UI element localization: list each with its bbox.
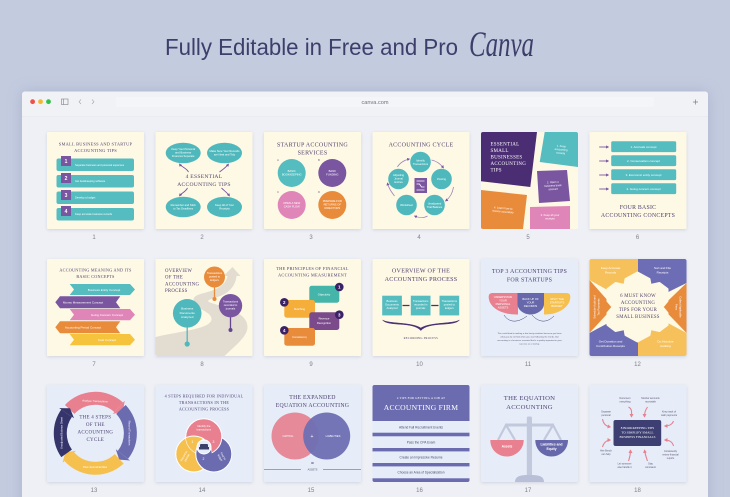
road with arrow (156, 267, 248, 356)
tip labels: Make Sure Your Records (210, 149, 240, 153)
pin: transactions posted (204, 266, 225, 301)
heading: THE PRINCIPLES OF FINANCIAL (276, 266, 349, 271)
arrow bands: Accounting Period Concept (65, 326, 101, 330)
ring segments (59, 398, 130, 468)
list rows: Get bookkeeping software (75, 179, 106, 183)
pin: transactions posted: Transactions (207, 271, 223, 275)
list rows: Keep accurate business records (75, 212, 113, 216)
arrow labels: everything (619, 400, 631, 404)
principle boxes: Matching (294, 307, 305, 311)
heading: OVERVIEW OF THE (392, 269, 450, 275)
semicircles: ASSETS (498, 306, 509, 310)
card 5: essential small businesses tips (481, 132, 578, 229)
segment labels: Fees (674, 304, 678, 311)
cycle circles (388, 152, 452, 215)
list rows: 4 (65, 209, 68, 215)
heading: THE 4 STEPS (79, 416, 111, 420)
number 18: 18 (634, 488, 641, 494)
pin: transactions posted: posted to (209, 274, 221, 278)
venn labels: Post to (219, 451, 227, 461)
process boxes: Analyzed (386, 306, 398, 310)
service circles: A (277, 159, 279, 162)
list rows (56, 156, 134, 220)
heading: PROCESS (165, 289, 188, 294)
venn labels (179, 424, 227, 464)
concept rows: 1. Accruals concept (630, 145, 657, 149)
tip labels: 4. Learn how to (494, 205, 513, 211)
semicircles (489, 293, 570, 315)
semicircles: BACK UP OF (522, 297, 539, 301)
concept rows (611, 141, 676, 194)
tip labels: to Tax Deadlines (173, 206, 194, 210)
heading: TRANSACTIONS IN THE (179, 400, 229, 405)
pan: liabilities and equity: Equity (546, 447, 557, 451)
circle labels: Unadjusted (428, 202, 442, 206)
paragraph: This could lead to making a few hasty mistakes because you have (497, 332, 562, 335)
tip labels: 2. Open a (547, 180, 559, 184)
number 2: 2 (200, 235, 204, 241)
flower centre (608, 272, 668, 342)
venn labels: 2 (203, 457, 205, 461)
number 3: 3 (309, 235, 313, 241)
tip labels: account (548, 187, 558, 191)
card 9: principles of measurement (264, 259, 361, 356)
pin: business documents (173, 299, 202, 347)
pin: business documents: Analyzed (181, 315, 194, 319)
tip labels: and Business (175, 150, 192, 154)
tip labels: are Neat and Tidy (214, 152, 236, 156)
service circles: D (318, 191, 320, 194)
number 8: 8 (200, 362, 204, 368)
heading: ACCOUNTING (490, 162, 526, 167)
number 16: 16 (416, 488, 423, 494)
arrow labels: else handle it (617, 466, 632, 469)
paragraph: accounting is a business essential that's a quality important in your (497, 339, 562, 342)
heading: ACCOUNTING (78, 430, 113, 436)
list rows: 3 (65, 193, 68, 199)
service circles: BANK (329, 169, 336, 173)
semicircles: STARTUP'S (550, 300, 565, 304)
venn labels: Identify the (197, 424, 211, 428)
arrow bands: Money Measurement Concept (63, 300, 103, 304)
arrow labels: receivable (645, 400, 657, 404)
number 7: 7 (92, 362, 96, 368)
card 8: overview road (156, 259, 252, 356)
ring labels: Record Transactions (128, 421, 132, 446)
number badges: 2 (283, 300, 286, 305)
circle labels: Adjusting (393, 173, 405, 177)
semicircles: RECORDS (524, 304, 537, 308)
segment labels: Records (605, 270, 617, 274)
arrow labels: Separate (601, 410, 612, 414)
tip labels: Remember and Stick (171, 203, 196, 207)
icon: money (199, 444, 209, 450)
heading: EQUATION ACCOUNTING (276, 403, 349, 409)
connector arcs (504, 315, 554, 321)
card 2: essential tips (156, 132, 252, 229)
heading: STARTUP ACCOUNTING (277, 142, 348, 148)
tip labels: Keep Your Personal (171, 147, 195, 151)
circle labels: Entries (394, 180, 403, 184)
heading: 6 MUST KNOW (620, 294, 656, 299)
arrow labels: cash payments (661, 414, 678, 417)
card 4: accounting cycle (372, 132, 470, 229)
venn diagram (176, 419, 232, 472)
arrows (599, 147, 608, 189)
number 10: 10 (416, 362, 423, 368)
browser toolbar (22, 92, 708, 117)
list rows: Develop a budget (75, 196, 96, 200)
number badges: 3 (338, 312, 341, 317)
arrow labels: Stay (648, 462, 654, 466)
arrow bands (55, 284, 135, 345)
segment labels: Receipts (657, 270, 669, 274)
heading: THE EQUATION (504, 395, 555, 402)
heading: ACCOUNTING CYCLE (389, 142, 453, 148)
number 13: 13 (91, 488, 98, 494)
list rows: Separate business and personal expenses (75, 163, 125, 167)
concept rows: 3. Economic entity concept (626, 173, 662, 177)
tip labels: business bank (544, 183, 562, 188)
pin: business documents: Documents (180, 311, 195, 315)
number 15: 15 (308, 488, 315, 494)
scale (498, 416, 561, 482)
card 11: top 3 tips (481, 259, 578, 356)
arrow labels: personal (601, 414, 611, 417)
heading: ACCOUNTING (506, 404, 553, 411)
service circles: CASH FLOW (284, 204, 300, 208)
circle labels: Journal (394, 176, 403, 180)
central box: 8 BOOKKEEPING TIPS (621, 426, 654, 430)
tip labels (171, 147, 240, 210)
pin: transactions recorded: recorded in (224, 303, 238, 307)
number 9: 9 (309, 362, 313, 368)
list text: Choose an Area of Specialization (398, 470, 445, 474)
tip labels: accounting (554, 147, 568, 152)
segment labels: Collect Applicable (678, 296, 682, 318)
heading: SMALL BUSINESS AND STARTUP (59, 142, 133, 146)
heading: ESSENTIAL (490, 142, 519, 148)
heading: TIPS FOR YOUR (619, 308, 658, 313)
heading: OF THE (165, 276, 183, 281)
pan: liabilities and equity: Liabilities and (541, 442, 562, 446)
heading: ACCOUNTING MEANING AND ITS (59, 268, 132, 272)
heading: SERVICES (298, 150, 327, 156)
principle boxes: Consistency (292, 335, 307, 339)
arrow labels: Hire Bench (600, 450, 613, 452)
concept rows: 2. Conservatism concept (627, 159, 660, 163)
segment labels: Keep Accurate (601, 266, 621, 270)
principle boxes: Recognition (317, 321, 332, 325)
arrows (180, 164, 230, 196)
brace (382, 320, 460, 330)
service circles (277, 159, 346, 219)
arrow labels: Consistently (664, 450, 678, 453)
pin: transactions recorded: journals (225, 306, 236, 310)
circle labels: Worksheet (400, 203, 413, 207)
semicircles: PERSONAL (496, 302, 511, 306)
list text: Pass the CPA Exam (407, 440, 436, 444)
process boxes: Documents (385, 302, 399, 306)
heading: ACCOUNTING CONCEPTS (601, 213, 675, 219)
arrow labels: Document (620, 397, 631, 400)
service circles: RETURNS OF (324, 202, 341, 206)
heading: SMALL (490, 149, 509, 154)
card 18: bookkeeping tips (590, 385, 686, 482)
arrow labels: review financial (662, 454, 679, 456)
canva wordmark: Canva (469, 24, 534, 64)
venn labels: 3 (213, 440, 215, 444)
title: Fully Editable in Free and Pro (165, 34, 458, 60)
heading: 4 STEPS REQUIRED FOR INDIVIDUAL (165, 394, 244, 398)
tip labels: records (556, 151, 566, 155)
browser toolbar: canva.com (361, 100, 389, 106)
process boxes: posted to (444, 302, 455, 306)
coloured segments (590, 259, 686, 356)
venn circles: CAPITAL (282, 434, 294, 438)
card 13: 4 steps cycle (47, 385, 144, 482)
heading: TIPS (490, 168, 502, 174)
card 12: 6 must know tips (590, 259, 686, 356)
list text: Create an Impressive Resume (399, 456, 443, 460)
pan: liabilities and equity (535, 440, 568, 456)
arrow bands: Going Concern Concept (91, 313, 123, 317)
semicircles: SPLIT THE (550, 297, 564, 301)
segment labels: Schedule Audit and (592, 295, 596, 319)
heading: 4 TIPS FOR GETTING A JOB AT (397, 396, 445, 400)
segment labels: Tax Payments (596, 298, 600, 315)
arrow labels: Monitor accounts (641, 397, 660, 400)
central box (614, 420, 661, 446)
process boxes: journals (415, 306, 426, 310)
arrow labels: reports (667, 457, 675, 460)
heading: ACCOUNTING MEASUREMENT (278, 272, 347, 278)
number badges (280, 283, 344, 335)
service circles: BOOKKEEPING (282, 172, 302, 176)
cycle arrows (388, 159, 454, 218)
service circles: B (318, 159, 320, 162)
circle labels: Transactions (413, 162, 429, 166)
equals and assets: ASSETS (308, 468, 318, 472)
service circles: PREPARE FOR (323, 199, 342, 203)
list rows: 2 (65, 176, 68, 182)
heading: BASIC CONCEPTS (76, 274, 115, 279)
heading: BUSINESSES (490, 156, 522, 160)
number badges: 1 (338, 285, 341, 290)
venn circles: + (311, 434, 314, 440)
venn labels: journal (183, 453, 191, 463)
heading: CYCLE (86, 438, 104, 443)
arrow labels: Let someone (618, 462, 632, 466)
semicircles: BUDGET (551, 304, 563, 308)
number 12: 12 (634, 362, 641, 368)
venn labels: Record in (179, 450, 189, 462)
heading: SMALL BUSINESS (616, 315, 660, 320)
heading: THE EXPANDED (289, 395, 336, 401)
semicircles: YOUR (527, 300, 534, 304)
ring labels: Unadjusted Balance Sheet (60, 417, 64, 449)
tip labels: Keep All of Your (215, 203, 234, 207)
heading: ACCOUNTING (165, 282, 199, 287)
browser window (22, 92, 708, 497)
list text: Attend Fall Recruitment Events (399, 426, 443, 430)
number 4: 4 (417, 235, 421, 241)
number 5: 5 (526, 235, 530, 241)
heading: OF THE (86, 423, 105, 428)
heading: OVERVIEW (165, 269, 192, 274)
process boxes: Transactions (413, 299, 429, 303)
card 15: expanded equation (264, 385, 361, 482)
venn labels: 1 (192, 440, 194, 444)
card 17: the equation (481, 385, 578, 482)
heading: TOP 3 ACCOUNTING TIPS (492, 269, 567, 275)
venn circles (272, 412, 350, 460)
ring labels (60, 399, 132, 469)
heading: FOUR BASIC (620, 205, 656, 211)
process boxes: recorded in (414, 302, 428, 306)
arrow labels: can help (601, 453, 611, 456)
service circles: FUNDING (326, 172, 338, 176)
arrow labels: Keep track of (662, 410, 676, 414)
caption: RECORDING PROCESS (404, 336, 438, 340)
service circles: BASIC (288, 169, 296, 173)
principle boxes (284, 286, 339, 346)
process boxes: ledgers (445, 306, 454, 310)
tip labels: Receipts (219, 206, 230, 210)
ring labels: Analyze Transactions (82, 399, 109, 403)
semicircles: YOUR (499, 298, 507, 302)
process boxes: Business (387, 299, 398, 303)
tip labels: receipts (545, 216, 555, 220)
paragraph: what you do not find when you start following the trends. But (500, 336, 559, 338)
card 14: steps venn (156, 385, 252, 482)
concept rows: 4. Going concern concept (626, 187, 661, 191)
heading: ACCOUNTING PROCESS (179, 406, 230, 412)
card 10: overview process (372, 259, 470, 356)
number badges: 4 (283, 328, 286, 333)
heading: ACCOUNTING TIPS (74, 148, 117, 153)
venn labels: transactions (197, 428, 212, 432)
pan: assets: Assets (502, 444, 513, 448)
circle labels (393, 158, 446, 209)
tip labels (492, 143, 569, 220)
tip labels: invoice accurately (492, 209, 514, 214)
card 6: four basic concepts (590, 132, 686, 229)
arrow labels: consistent (645, 466, 656, 469)
card 1: small business tips (47, 132, 144, 229)
segment labels: Sort and File (654, 266, 671, 270)
segment labels: Get Donation and (599, 340, 623, 344)
principle boxes: Objectivity (318, 292, 331, 296)
header band (372, 385, 470, 421)
circle labels: Trial Balance (427, 205, 443, 209)
central box: BUSINESS FINANCIALS (620, 435, 656, 439)
number 11: 11 (525, 362, 532, 368)
pin: business documents: Business (181, 306, 194, 310)
heading: FOR STARTUPS (507, 277, 552, 283)
ring labels: Post Journal Entries (83, 465, 108, 469)
central box: TO SIMPLIFY SMALL (621, 430, 654, 434)
card 16: accounting firm tips (372, 385, 470, 482)
venn circles: LIABILITIES (326, 434, 341, 438)
number 6: 6 (636, 235, 640, 241)
pin: transactions posted: ledgers (210, 278, 220, 282)
number 14: 14 (199, 488, 206, 494)
circle labels: Posting (437, 177, 446, 181)
icon: document (414, 178, 427, 193)
tip labels: 3. Keep all your (541, 213, 559, 217)
service circles: DIRECTORS (324, 206, 340, 210)
heading: ACCOUNTING TIPS (177, 182, 231, 188)
number 17: 17 (525, 488, 532, 494)
pin: transactions recorded: Transactions (223, 300, 239, 304)
segment labels: Contribution Receipts (596, 344, 625, 348)
service circles: C (277, 191, 279, 194)
principle boxes: Revenue (319, 316, 330, 320)
equals and assets (264, 461, 361, 472)
service circles: OPEN A NEW (283, 201, 301, 205)
heading: ACCOUNTING PROCESS (385, 277, 458, 283)
process boxes (382, 296, 459, 315)
arrow bands: Cost Concept (98, 338, 116, 342)
arrows (602, 407, 674, 461)
segment labels: Auditing (660, 344, 671, 348)
venn labels: ledger (217, 454, 224, 462)
tip labels: Finances Separate (172, 154, 195, 158)
title (165, 24, 534, 64)
card 3: startup accounting services (264, 132, 361, 229)
arrow bands: Business Entity Concept (88, 288, 120, 292)
segment labels (592, 266, 682, 348)
number 1: 1 (92, 235, 96, 241)
card 7: meaning and basic concepts (47, 259, 144, 356)
heading: 4 ESSENTIAL (186, 174, 223, 180)
tip ellipses (166, 143, 242, 217)
list rows: 1 (65, 159, 68, 165)
heading: ACCOUNTING FIRM (384, 403, 458, 412)
paragraph: success as a startup. (519, 342, 540, 346)
circle labels: Identify (416, 158, 425, 162)
heading: ACCOUNTING (621, 301, 655, 306)
tip labels: 1. Keep (557, 144, 567, 148)
segment labels: Do Absolute (657, 340, 674, 344)
process boxes: Transactions (442, 299, 458, 303)
semicircles: UNDERSTAND (494, 295, 512, 299)
equals and assets: = (311, 461, 314, 467)
pin: transactions recorded (219, 294, 242, 332)
